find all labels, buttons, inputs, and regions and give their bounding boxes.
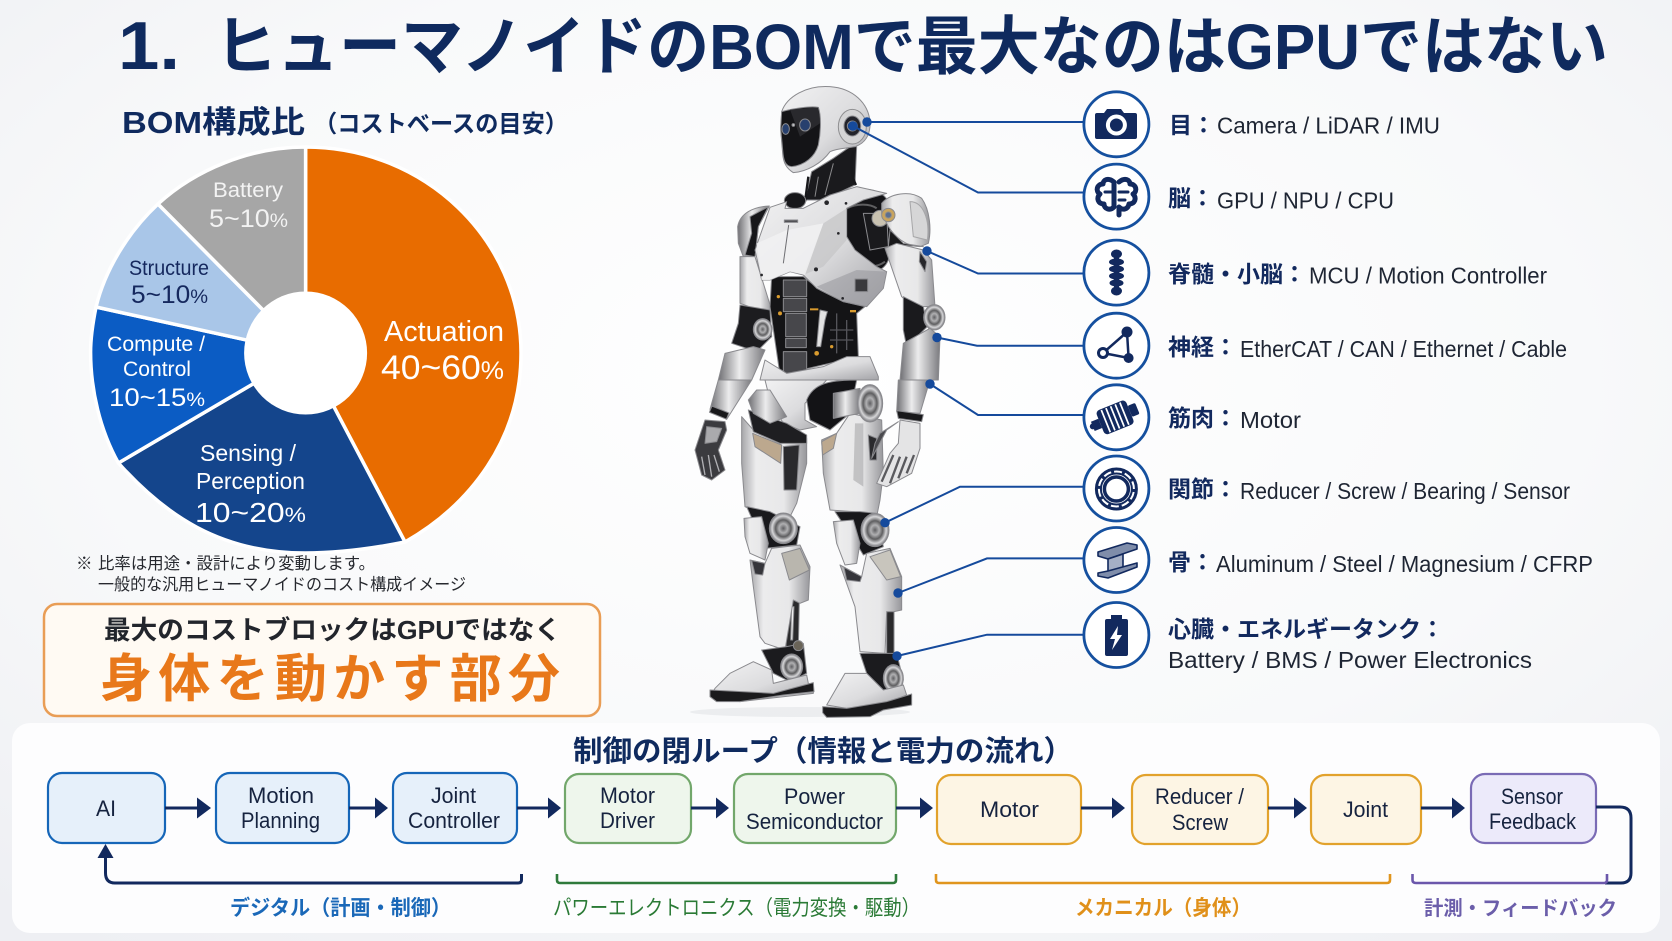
icon: motor (1084, 385, 1149, 450)
slice: Sensing (118, 353, 405, 553)
node: Motor Driver (565, 774, 691, 843)
flow arrows (165, 798, 1465, 818)
row: joints: 関節： (1168, 476, 1237, 502)
row: brain (1168, 185, 1394, 214)
icon: battery (1084, 602, 1149, 668)
group label: measurement: 計測・フィードバック (1424, 897, 1617, 920)
group label: power electronics: パワーエレクトロニクス（電力変換・駆動） (553, 897, 920, 920)
row: bones: Aluminum / Steel / Magnesium / CFRP (1216, 551, 1593, 577)
node: Reducer / Screw: Reducer / (1155, 784, 1245, 809)
node: Motion Planning (216, 773, 349, 843)
node: Power Semiconductor: Power (784, 784, 845, 809)
row: heart (1168, 616, 1532, 673)
title: ヒューマノイドのBOMで最大なのはGPUではない (215, 11, 1608, 83)
node: Power Semiconductor (734, 774, 896, 843)
row: eyes: 目： (1169, 112, 1215, 138)
row: spinal cord (1168, 261, 1547, 289)
row: heart: 心臓・エネルギータンク： (1168, 616, 1444, 642)
slice: Actuation (306, 147, 521, 542)
callout (44, 604, 600, 716)
row: bones: 骨： (1168, 549, 1214, 575)
title: 1. (118, 8, 180, 84)
callout: 最大のコストブロックはGPUではなく (104, 615, 561, 645)
row: heart: Battery / BMS / Power Electronics (1168, 647, 1532, 673)
slice: Structure (96, 204, 306, 353)
feedback return line (98, 807, 1631, 883)
row: nerves: 神経： (1168, 334, 1237, 360)
pie labels: Compute / (107, 333, 205, 356)
row: spinal cord: MCU / Motion Controller (1309, 263, 1547, 289)
row: muscle: Motor (1240, 407, 1301, 433)
pie hole (244, 292, 367, 414)
slice: Battery (158, 147, 306, 353)
icon: camera (1084, 92, 1149, 157)
row: brain: 脳： (1168, 185, 1214, 211)
callout: 身体を動かす部分 (100, 651, 560, 709)
node: Joint Controller: Joint (431, 783, 476, 808)
node: Joint: Joint (1343, 797, 1388, 822)
robot illustration (690, 87, 945, 717)
icon: bearing (1084, 456, 1149, 521)
pie labels: 40~60% (381, 349, 504, 387)
node: Joint Controller (393, 773, 517, 843)
row: muscle (1168, 405, 1301, 433)
footnote: 比率は用途・設計により変動します。 (98, 554, 375, 573)
pie labels: 5~10% (209, 205, 288, 233)
row: muscle: 筋肉： (1168, 405, 1237, 431)
leader lines (848, 117, 1083, 661)
parts list (1168, 112, 1593, 673)
node: Motor: Motor (980, 797, 1039, 822)
node: AI (48, 773, 165, 843)
node: Sensor Feedback: Feedback (1489, 809, 1577, 834)
pie labels: Control (123, 358, 191, 381)
node: Sensor Feedback (1471, 774, 1596, 843)
pie labels (107, 179, 504, 528)
pie labels: Structure (129, 257, 209, 280)
footnote (76, 554, 466, 594)
footnote: ※ (76, 555, 92, 573)
node: Joint Controller: Controller (408, 808, 500, 833)
loop heading: 制御の閉ループ（情報と電力の流れ） (573, 735, 1073, 768)
group brackets (557, 874, 1607, 883)
row: brain: GPU / NPU / CPU (1217, 188, 1394, 214)
node: Motor Driver: Motor (600, 783, 655, 808)
row: nerves: EtherCAT / CAN / Ethernet / Cable (1240, 336, 1567, 362)
group label: digital: デジタル（計画・制御） (230, 896, 451, 920)
node: Power Semiconductor: Semiconductor (746, 809, 883, 834)
icon: spine (1084, 240, 1149, 305)
icon: I-beam (1084, 528, 1149, 592)
row: joints: Reducer / Screw / Bearing / Sensor (1240, 478, 1570, 504)
icon: network (1084, 313, 1149, 378)
panel: control loop (12, 723, 1660, 933)
footnote: 一般的な汎用ヒューマノイドのコスト構成イメージ (98, 575, 466, 594)
node: Motor Driver: Driver (600, 808, 655, 833)
heading: BOM composition: BOM構成比 (122, 105, 305, 140)
node: Sensor Feedback: Sensor (1501, 784, 1563, 809)
pie labels: Battery (213, 179, 284, 202)
node: Reducer / Screw: Screw (1172, 810, 1228, 835)
icon: brain (1084, 164, 1149, 229)
heading: BOM composition (122, 105, 568, 140)
node: Motor (937, 775, 1081, 844)
pie labels: Perception (196, 468, 305, 494)
pie labels: Sensing / (200, 440, 297, 466)
node: AI: AI (96, 796, 116, 821)
pie labels: Actuation (384, 316, 504, 348)
pie labels: 10~15 % (109, 384, 205, 412)
row: eyes: Camera / LiDAR / IMU (1217, 112, 1440, 138)
pie labels: 5~10% (131, 281, 208, 309)
node: Joint (1311, 775, 1421, 844)
pie labels: 10~20 % (195, 497, 306, 528)
node: Motion Planning: Motion (248, 783, 314, 808)
group label: mechanical: メカニカル（身体） (1075, 897, 1251, 920)
pie chart: BOM share (91, 147, 521, 553)
row: spinal cord: 脊髄・小脳： (1168, 261, 1306, 287)
node: Reducer / Screw (1132, 775, 1268, 844)
node: Motion Planning: Planning (241, 808, 320, 833)
heading: BOM composition: （コストベースの目安） (314, 111, 568, 138)
slice: Compute (91, 307, 306, 463)
